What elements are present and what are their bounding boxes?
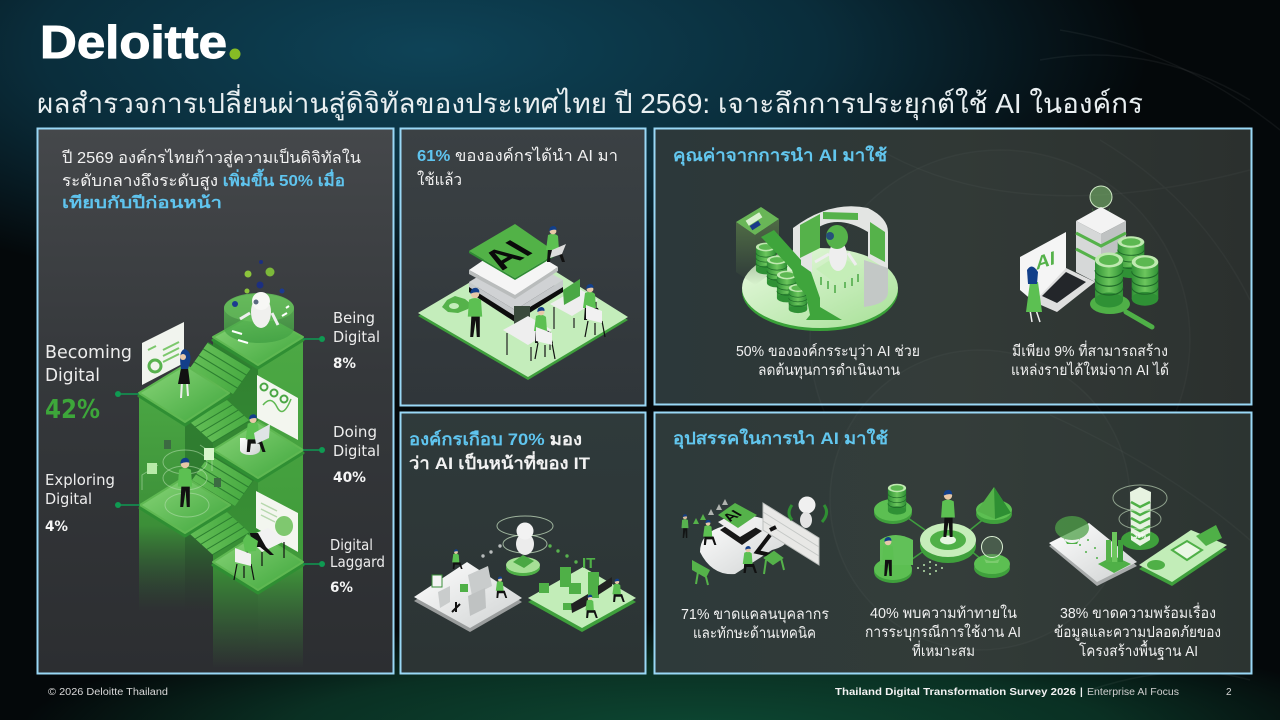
- title: ผลสำรวจการเปลี่ยนผ่านสู่ดิจิทัลของประเทศไทย ปี 2569: เจาะลึกการประยุกต์ใช้ AI ในองค์กร: [37, 84, 1143, 121]
- caption: 71% talent: 71% ขาดแคลนบุคลากร: [681, 606, 829, 624]
- caption: 50% cost reduction: [736, 343, 920, 380]
- panel: 61% adoption: [400, 128, 646, 406]
- illustration: new revenue: [1020, 186, 1158, 327]
- label: exploring digital 4%: [45, 471, 140, 535]
- adoption text: ใช้แล้ว: [417, 170, 462, 189]
- caption: 50% cost reduction: 50% ขององค์กรระบุว่า AI ช่วย: [736, 343, 920, 361]
- caption: 9% new revenue: [1011, 340, 1169, 379]
- caption: 71% talent: [681, 606, 829, 642]
- heading: value: คุณค่าจากการนำ AI มาใช้: [673, 145, 887, 166]
- label: being digital 8%: [303, 309, 380, 372]
- caption: 40% use cases: 40% พบความท้าทายใน: [870, 604, 1017, 622]
- caption: 50% cost reduction: ลดต้นทุนการดำเนินงาน: [758, 362, 900, 380]
- label: being digital 8%: 8%: [333, 356, 356, 372]
- decorative sphere: [830, 350, 1250, 650]
- staircase illustration: [139, 260, 303, 668]
- label: becoming digital 42%: [45, 343, 139, 425]
- IT ownership text: [409, 429, 591, 473]
- adoption text: [417, 146, 618, 189]
- label: being digital 8%: Digital: [333, 328, 380, 346]
- platform: exploring digital: [140, 440, 230, 536]
- label: doing digital 40%: Doing: [333, 423, 377, 441]
- footer: [48, 687, 1232, 698]
- panel: AI adoption barriers: [654, 350, 1252, 674]
- illustration: AI server platform: AI: [473, 235, 542, 276]
- caption: 71% talent: และทักษะด้านเทคนิค: [693, 625, 816, 642]
- illustration: use case identification: [874, 484, 1012, 583]
- caption: 40% use cases: [865, 604, 1021, 660]
- footer: |: [1080, 687, 1083, 698]
- footer: © 2026 Deloitte Thailand: [48, 687, 168, 698]
- panel intro text: ระดับกลางถึงระดับสูง เพิ่มขึ้น 50% เมื่อ: [62, 168, 345, 191]
- illustration: new revenue: AI: [1036, 247, 1055, 275]
- panel: value from AI: [654, 128, 1252, 530]
- caption: 38% readiness: 38% ขาดความพร้อมเรื่อง: [1060, 602, 1216, 622]
- footer: 2: [1226, 687, 1232, 698]
- label: being digital 8%: Being: [333, 309, 375, 327]
- panel intro text: [62, 147, 361, 212]
- illustration: AI server platform: [418, 224, 628, 380]
- illustration: talent shortage: AI: [719, 508, 746, 524]
- footer: Enterprise AI Focus: [1087, 687, 1179, 698]
- illustration: data and infrastructure readiness: 38%: [1134, 534, 1147, 540]
- illustration: cost reduction: [736, 206, 898, 331]
- IT ownership text: ว่า AI เป็นหน้าที่ของ IT: [409, 451, 591, 473]
- label: digital laggard 6%: Laggard: [330, 553, 385, 571]
- caption: 9% new revenue: แหล่งรายได้ใหม่จาก AI ได้: [1011, 361, 1169, 379]
- platform: becoming digital: [139, 322, 229, 425]
- label: doing digital 40%: Digital: [333, 442, 380, 460]
- illustration: AI between business and IT: [414, 516, 636, 632]
- label: becoming digital 42%: 42%: [45, 395, 100, 425]
- label: exploring digital 4%: 4%: [45, 519, 68, 535]
- caption: 38% readiness: [1054, 602, 1221, 660]
- caption: 9% new revenue: มีเพียง 9% ที่สามารถสร้าง: [1012, 340, 1168, 360]
- label: becoming digital 42%: Becoming: [45, 343, 132, 363]
- caption: 38% readiness: โครงสร้างพื้นฐาน AI: [1079, 640, 1198, 660]
- label: doing digital 40%: [303, 423, 380, 486]
- platform: digital laggard: [213, 491, 303, 593]
- caption: 40% use cases: ที่เหมาะสม: [912, 640, 975, 660]
- decorative sphere: [810, 140, 1250, 530]
- illustration: AI between business and IT: IT: [582, 555, 595, 572]
- panel: 70% sees AI as IT function: [400, 412, 646, 674]
- label: digital laggard 6%: 6%: [330, 580, 353, 596]
- illustration: talent shortage: [682, 496, 827, 585]
- caption: 40% use cases: การระบุกรณีการใช้งาน AI: [865, 623, 1021, 642]
- label: digital laggard 6%: [303, 536, 385, 596]
- panel intro text: ปี 2569 องค์กรไทยก้าวสู่ความเป็นดิจิทัลใน: [62, 147, 361, 168]
- panel intro text: เทียบกับปีก่อนหน้า: [62, 193, 222, 212]
- caption: 38% readiness: ข้อมูลและความปลอดภัยของ: [1054, 624, 1221, 641]
- label: exploring digital 4%: Digital: [45, 490, 92, 508]
- logo: Deloitte: Deloitte: [40, 16, 227, 68]
- panel: digital maturity staircase: [38, 128, 1252, 698]
- label: digital laggard 6%: Digital: [330, 536, 373, 554]
- footer: Thailand Digital Transformation Survey 2026: [835, 687, 1077, 698]
- platform: doing digital: [213, 375, 303, 481]
- IT ownership text: องค์กรเกือบ 70% มอง: [409, 429, 582, 449]
- label: exploring digital 4%: Exploring: [45, 471, 115, 489]
- label: doing digital 40%: 40%: [333, 470, 366, 486]
- label: becoming digital 42%: Digital: [45, 366, 100, 386]
- adoption text: 61% ขององค์กรได้นำ AI มา: [417, 146, 618, 165]
- platform: being digital: [213, 260, 303, 368]
- illustration: data and infrastructure readiness: [1049, 485, 1227, 586]
- heading: barriers: อุปสรรคในการนำ AI มาใช้: [673, 428, 888, 449]
